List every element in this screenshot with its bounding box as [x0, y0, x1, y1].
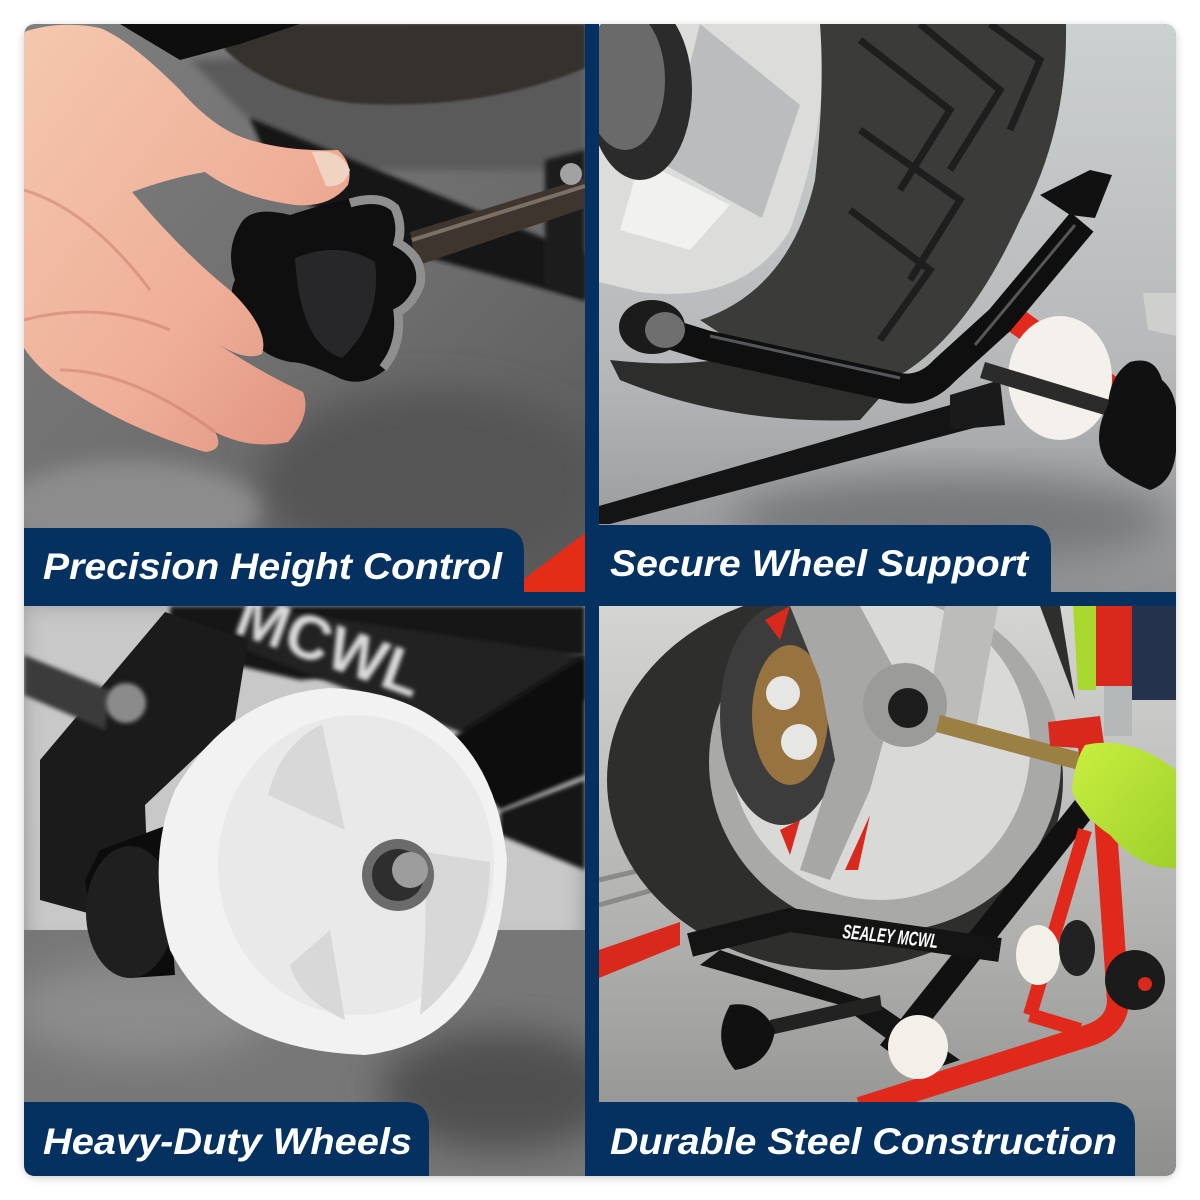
photo background: garage floor: [24, 24, 585, 592]
caption: Heavy-Duty Wheels: [24, 1102, 429, 1176]
alloy rim: [599, 24, 823, 294]
red upright: [1096, 606, 1134, 686]
caption: Durable Steel Construction: [585, 1102, 1135, 1176]
arm end caps: [619, 300, 685, 354]
blurred upper background: [24, 606, 585, 946]
glove upper: [1073, 606, 1096, 690]
axle rod: [936, 715, 1090, 772]
logo on arm: SEALEY MCWL: [841, 921, 939, 953]
floor tone patches: [255, 385, 577, 534]
star knob: [231, 196, 425, 382]
logo on frame: MCWL: [227, 580, 432, 711]
caption: Durable Steel Construction: Durable Steel Construction: [610, 1121, 1117, 1162]
stand base black: [700, 950, 960, 1070]
tyre: [700, 24, 1066, 384]
red left rail: [599, 922, 680, 978]
caption: Heavy-Duty Wheels: Heavy-Duty Wheels: [43, 1121, 412, 1162]
finger nail: [312, 151, 350, 186]
photo background: floor: [599, 24, 1176, 592]
black front stand: [880, 800, 1090, 1060]
red stand: [1010, 312, 1116, 400]
castors: [888, 1015, 948, 1079]
red disc carrier accents: [765, 606, 870, 870]
black frame bars: [170, 606, 585, 680]
cradle arm: [640, 222, 1082, 389]
caption: Secure Wheel Support: [585, 525, 1051, 606]
hand: [24, 25, 350, 452]
spokes: [790, 606, 900, 880]
threaded rod: [980, 362, 1110, 416]
white wheel: [159, 688, 507, 1055]
threaded rod: [410, 178, 585, 266]
black stand tube: [599, 405, 985, 524]
red stand bracket: [1048, 716, 1112, 800]
chrome rods: [599, 869, 652, 908]
panel: heavy-duty wheels: [24, 606, 585, 1176]
photo background: floor: [599, 606, 1176, 1176]
green glove: [1072, 743, 1176, 868]
spring: [24, 655, 110, 730]
pipe: [85, 826, 175, 978]
sleeve: [1132, 606, 1176, 700]
red stand corner: [524, 533, 585, 592]
tyre: [607, 590, 1063, 970]
caption: Precision Height Control: [24, 528, 524, 592]
base knob and rod: [770, 995, 882, 1035]
tyre tread: [850, 24, 1040, 340]
bracket: [950, 380, 1005, 430]
tyre: [225, 24, 585, 105]
brake disc: [720, 605, 844, 825]
bolt: [106, 683, 146, 723]
silver rim: [709, 592, 1061, 932]
palm creases: [24, 190, 215, 432]
stand bracket: [40, 612, 248, 930]
hub nut: [362, 839, 434, 911]
cradle arm with logo: [690, 920, 1000, 950]
panel: precision height control: [0, 24, 600, 592]
fork leg: [925, 606, 998, 735]
socket: [1143, 293, 1176, 336]
wheel inner recess: [218, 715, 494, 1015]
red stand frame: [860, 800, 1118, 1108]
photo background: floor: [24, 606, 585, 1176]
knob: [1099, 360, 1177, 490]
caption: Precision Height Control: Precision Height Control: [43, 546, 503, 587]
panel: durable steel construction: [599, 590, 1176, 1176]
panel: secure wheel support: [585, 0, 1177, 592]
brake disc: [599, 24, 692, 180]
white wheel: [1008, 316, 1112, 440]
caption: Secure Wheel Support: Secure Wheel Support: [610, 543, 1030, 584]
black stand frame: [120, 24, 300, 60]
